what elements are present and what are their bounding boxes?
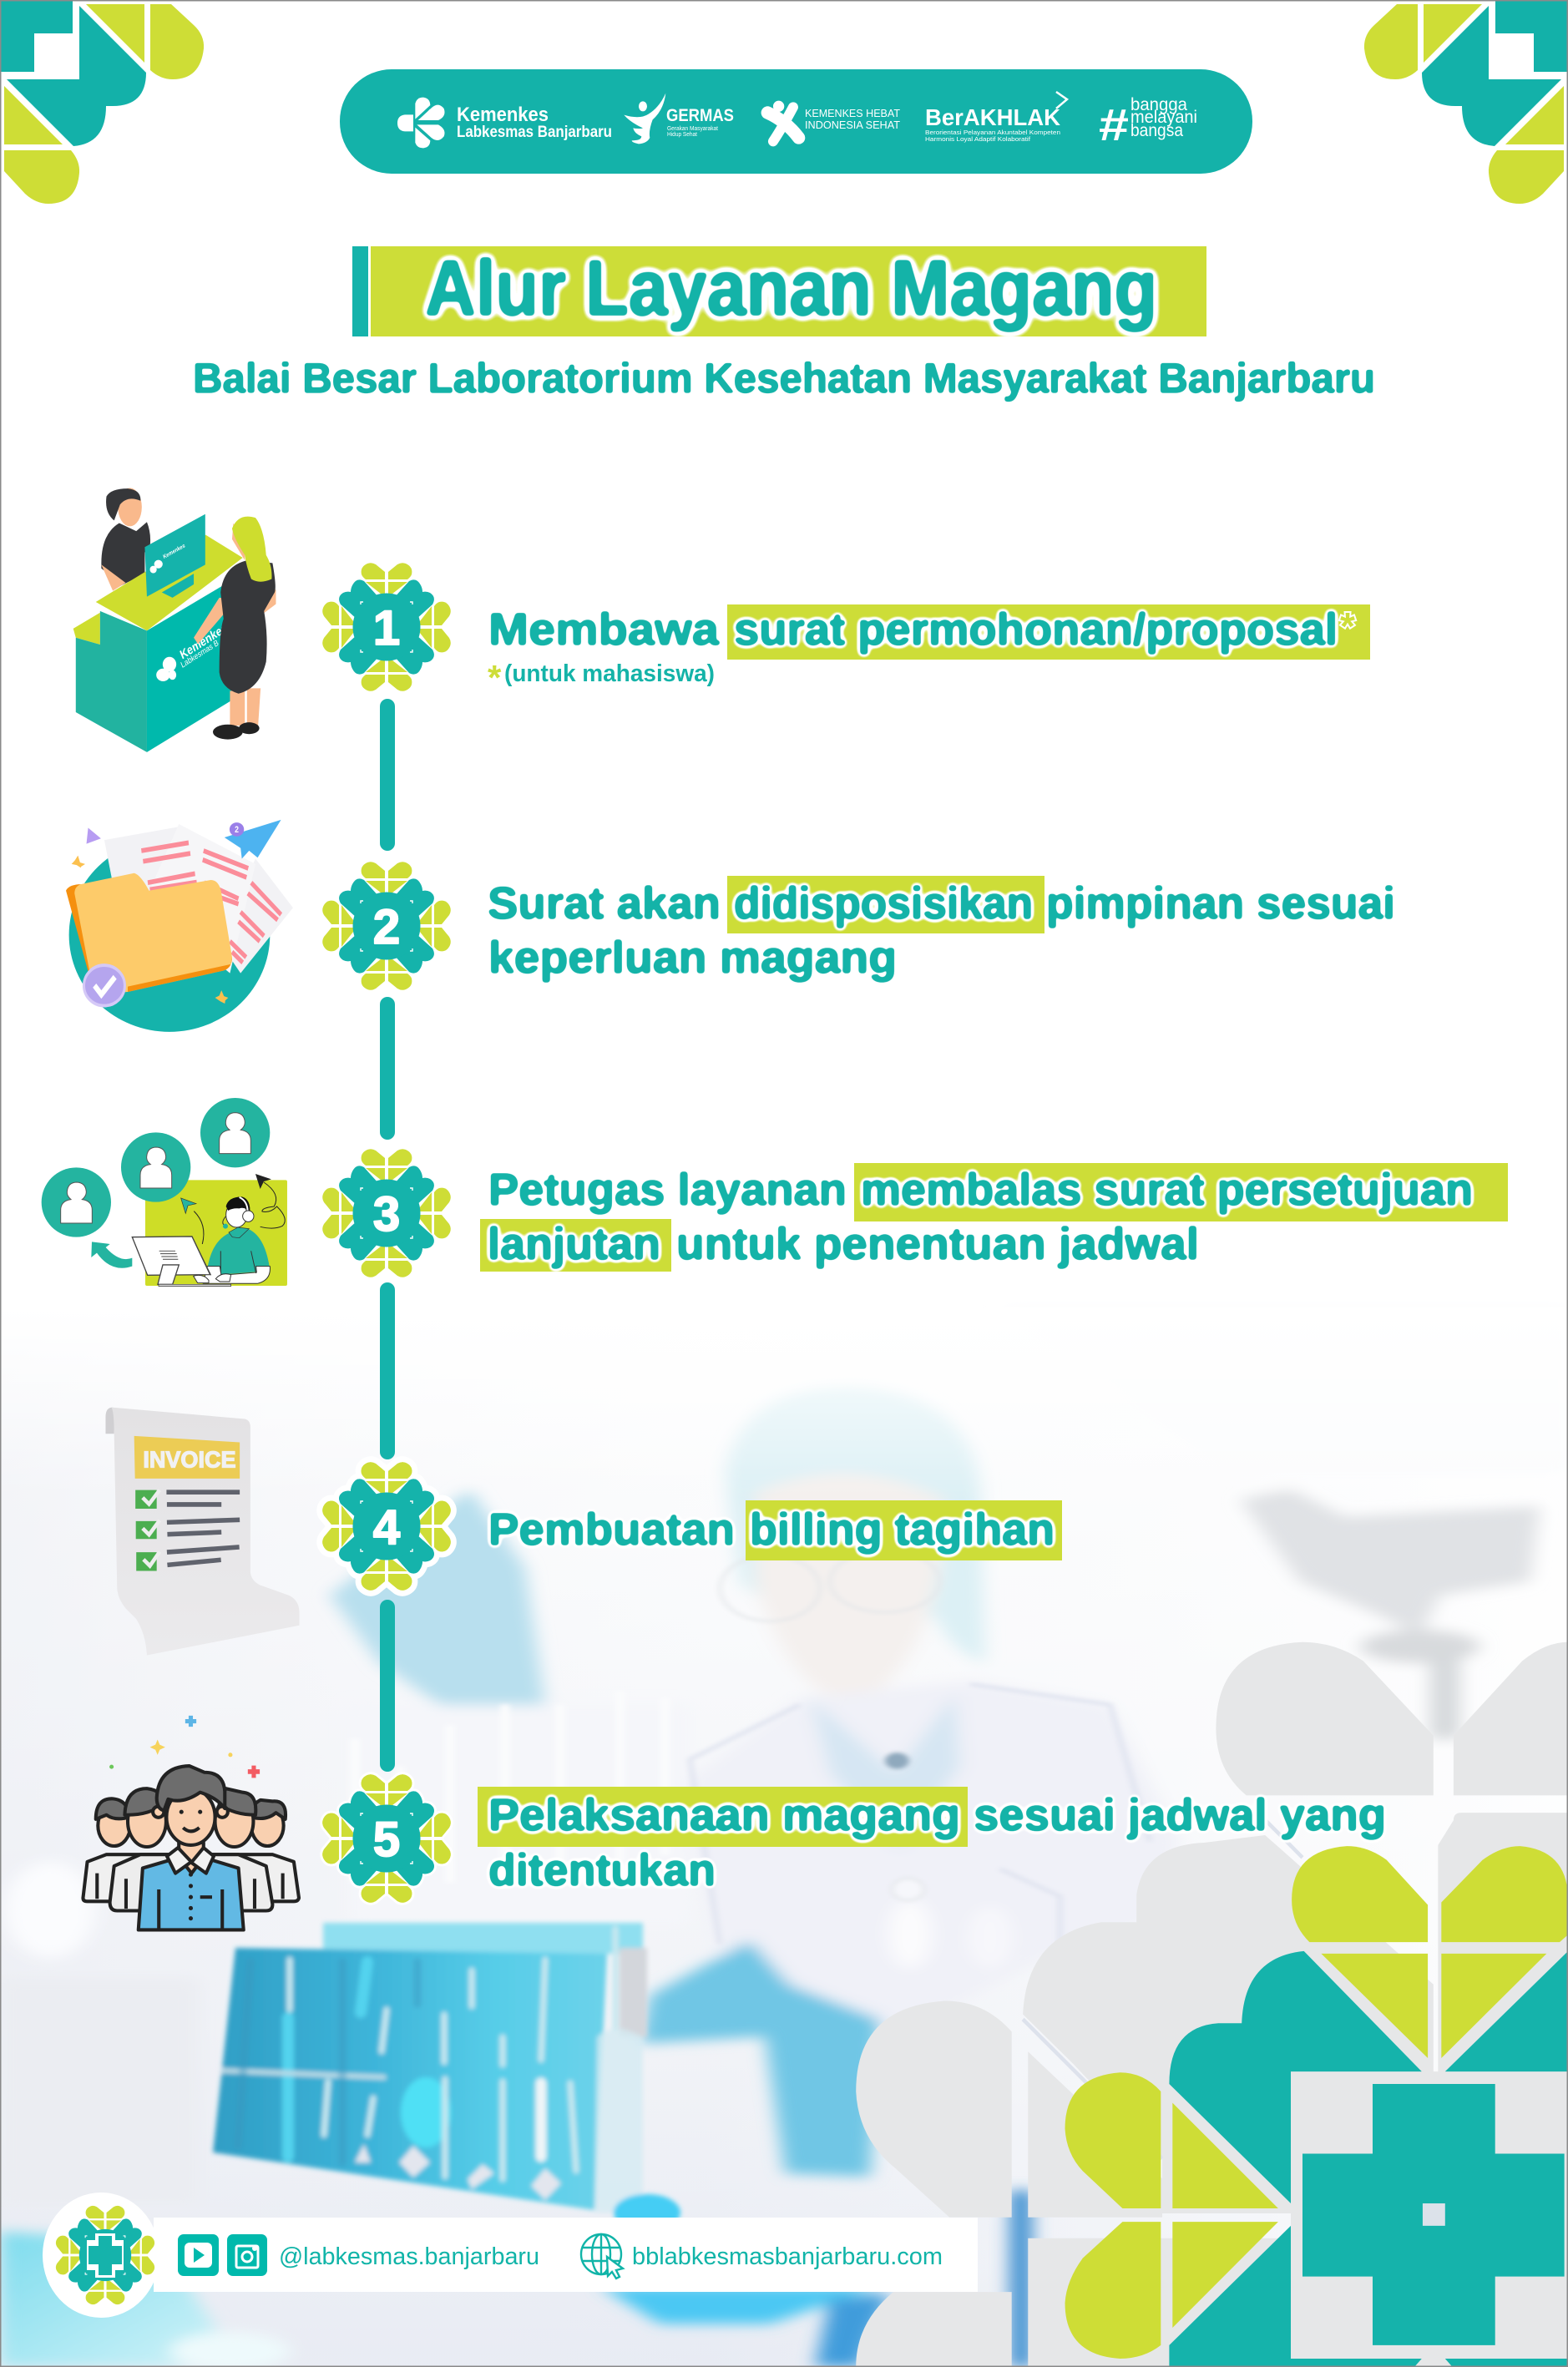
step 1 text: (untuk mahasiswa) — [504, 660, 715, 687]
illustration: reception desk: Kemenkes — [178, 620, 229, 662]
step 3 text — [480, 1163, 1508, 1272]
step 2 badge: 2 — [373, 900, 400, 954]
logo: Kemenkes: Labkesmas Banjarbaru — [457, 124, 612, 141]
logo: bangga melayani bangsa: bangsa — [1130, 121, 1183, 140]
icon: globe with cursor — [581, 2234, 623, 2278]
step 2 text — [488, 876, 1395, 983]
logo: GERMAS: Hidup Sehat — [667, 132, 697, 138]
step 1 text: Membawa — [488, 604, 720, 655]
step 5 badge — [322, 1774, 451, 1903]
logo: bangga melayani bangsa: # — [1099, 100, 1129, 150]
website address: bblabkesmasbanjarbaru.com — [632, 2243, 943, 2270]
step 5 text: Pelaksanaan magang — [488, 1790, 960, 1840]
step 5 text: sesuai jadwal yang — [974, 1790, 1386, 1840]
logo: Kemenkes: Kemenkes — [457, 104, 549, 126]
illustration: folder and documents: 2 — [235, 825, 239, 836]
step 1 text: * — [1340, 604, 1355, 648]
title banner: Alur Layanan Magang — [425, 244, 1157, 331]
step 1 text: surat permohonan/proposal — [734, 604, 1338, 655]
logo: BerAKHLAK — [925, 92, 1067, 143]
step 5 text — [478, 1787, 1386, 1895]
icon: Instagram — [227, 2234, 267, 2276]
step 3 text: lanjutan — [488, 1219, 660, 1269]
logo: Kemenkes Hebat Indonesia Sehat: KEMENKES HEBAT — [805, 107, 900, 119]
illustration: reception desk: Labkesmas B — [180, 638, 220, 670]
logo: bangga melayani bangsa: bangga — [1130, 95, 1187, 114]
illustration: invoice: INVOICE — [143, 1447, 236, 1473]
decorative corner: top left — [0, 0, 204, 204]
step 3 badge — [322, 1149, 451, 1277]
logo: GERMAS: GERMAS — [666, 106, 734, 125]
subtitle: Balai Besar Laboratorium Kesehatan Masyarakat Banjarbaru — [193, 355, 1375, 402]
illustration: reception desk — [73, 488, 276, 752]
step 1 text: * — [488, 658, 502, 697]
icon: YouTube — [178, 2234, 219, 2276]
step 4 text: Pembuatan — [488, 1505, 735, 1555]
logo: BerAKHLAK: Berorientasi Pelayanan Akuntabel Kompeten — [925, 129, 1060, 136]
logo: Kemenkes Hebat Indonesia Sehat: INDONESIA SEHAT — [805, 119, 900, 131]
step 1 badge: 1 — [373, 601, 400, 655]
logo: Kemenkes — [397, 98, 612, 148]
timeline connectors — [380, 699, 395, 1772]
logo: GERMAS: Gerakan Masyarakat — [667, 126, 718, 132]
step 2 text: keperluan magang — [488, 933, 897, 983]
step 5 badge: 5 — [373, 1813, 400, 1867]
logo: bangga melayani bangsa — [1099, 95, 1197, 150]
step 5 text: ditentukan — [488, 1845, 716, 1895]
step 2 text: pimpinan sesuai — [1046, 878, 1395, 928]
header logo pill — [340, 69, 1252, 174]
illustration: invoice — [105, 1408, 300, 1655]
step 2 text: Surat akan — [488, 878, 721, 928]
logo: BerAKHLAK: BerAKHLAK — [925, 104, 1060, 130]
step 2 text: didisposisikan — [734, 878, 1033, 928]
logo: bangga melayani bangsa: melayani — [1130, 108, 1197, 127]
step 4 text: billing tagihan — [750, 1505, 1055, 1555]
background photo: laboratory scientist — [0, 1307, 1568, 2367]
step 1 badge — [322, 563, 451, 691]
step 3 badge: 3 — [373, 1187, 400, 1242]
logo: GERMAS — [624, 94, 734, 144]
social handle: @labkesmas.banjarbaru — [279, 2243, 539, 2270]
illustration: officer replying to people — [42, 1098, 287, 1287]
step 2 badge — [322, 862, 451, 990]
step 3 text: membalas surat persetujuan — [861, 1165, 1473, 1215]
illustration: team of people — [83, 1716, 299, 1930]
test tube rack — [213, 1923, 680, 2231]
step 4 badge: 4 — [373, 1500, 400, 1555]
step 4 badge — [322, 1462, 451, 1591]
footer contact bar — [43, 2193, 978, 2318]
large decorative flower: bottom right — [856, 1642, 1568, 2367]
step 4 text — [488, 1500, 1062, 1560]
logo: BerAKHLAK: Harmonis Loyal Adaptif Kolaboratif — [925, 135, 1031, 143]
logo: Kemenkes Hebat Indonesia Sehat — [767, 102, 900, 141]
illustration: reception desk: Kemenkes — [163, 543, 186, 560]
illustration: folder and documents — [66, 820, 293, 1032]
footer logo badge — [43, 2193, 159, 2318]
step 3 text: Petugas layanan — [488, 1165, 847, 1215]
step 3 text: untuk penentuan jadwal — [676, 1219, 1199, 1269]
step 1 text — [488, 604, 1370, 697]
decorative corner: top right — [1364, 0, 1568, 204]
